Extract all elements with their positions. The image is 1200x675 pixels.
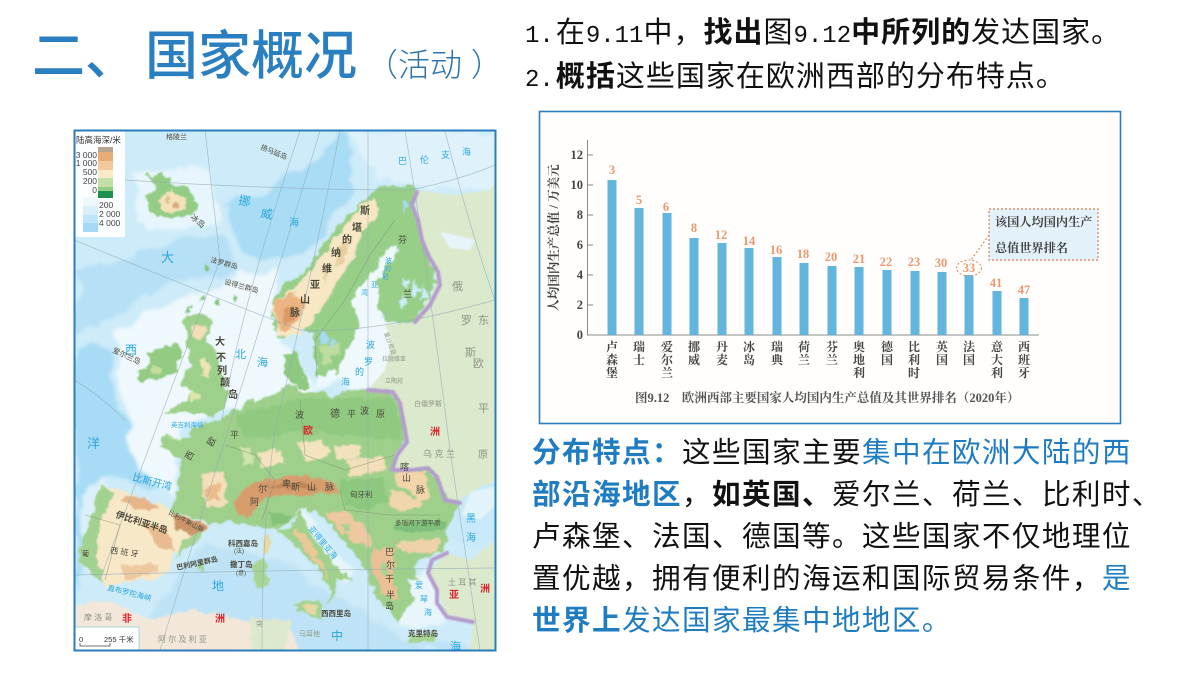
map labels: 阿 尔 及 利 亚 [158, 634, 207, 644]
map labels: 尼 [382, 273, 389, 281]
rank labels: 21 [853, 252, 865, 266]
map labels: 设得兰群岛 [223, 277, 260, 295]
map labels: 山 [300, 293, 310, 306]
country labels: 岛 [743, 352, 755, 367]
country labels: 爱 [660, 339, 673, 354]
map labels: 阿 [250, 497, 259, 507]
y axis ticks: 12 [570, 148, 583, 162]
chart frame [540, 112, 1120, 424]
map labels: 土 耳 其 [448, 577, 476, 587]
map labels: 挪 [237, 193, 252, 209]
map labels: 波 [295, 409, 304, 420]
map labels: 的 [342, 233, 352, 246]
map labels: 西 班 牙 [110, 545, 139, 559]
rank labels: 47 [1018, 283, 1030, 297]
line 2: 部沿海地区，如英国、爱尔兰、荷兰、比利时、 [532, 479, 1162, 511]
map labels: 罗 [364, 357, 373, 367]
rank labels: 23 [908, 255, 920, 269]
rank labels: 8 [691, 221, 697, 235]
map labels: 喀 [400, 461, 409, 472]
map labels: 俄 [452, 280, 463, 293]
map labels: 爱 [415, 581, 423, 590]
y axis ticks: 6 [577, 238, 583, 252]
map labels: 脉 [416, 484, 425, 495]
map labels: 比斯开湾 [131, 470, 173, 493]
map labels: 格陵兰 [166, 132, 187, 141]
mainland Europe [162, 385, 460, 625]
map labels: 山 [307, 482, 316, 492]
map legend: 500 [83, 167, 97, 177]
map legend: 200 [83, 176, 97, 186]
map labels: 大 [161, 250, 174, 265]
map labels: (法) [234, 547, 244, 555]
map labels: 比利牛斯山脉 [167, 508, 206, 534]
map labels: 原 [376, 409, 385, 419]
rank labels: 18 [797, 247, 809, 261]
rank labels: 3 [609, 163, 615, 177]
country labels: 时 [908, 365, 920, 380]
map labels: 巴利阿里群岛 [176, 554, 218, 572]
instruction 2: 2.概括这些国家在欧洲西部的分布特点。 [525, 61, 1066, 94]
map labels: 突 [256, 619, 263, 628]
country labels: 卢 [606, 339, 618, 354]
map legend: 陆高海深/米 [76, 135, 121, 145]
country labels: 堡 [606, 365, 618, 380]
country labels: 芬 [826, 339, 838, 354]
map labels: 西西里岛 [321, 608, 351, 618]
map labels: 扬马延岛 [259, 143, 289, 161]
borders [85, 220, 440, 580]
map labels: 大 [215, 335, 225, 348]
map labels: 地 [212, 579, 224, 593]
y axis ticks: 10 [570, 178, 583, 192]
country labels: 牙 [1018, 365, 1030, 380]
map labels: 东 [478, 314, 489, 327]
country labels: 丹 [716, 340, 728, 354]
map labels: 洲 [430, 426, 440, 438]
country labels: 德 [881, 339, 894, 354]
map labels: 法罗群岛 [209, 255, 239, 271]
map labels: 科西嘉岛 [228, 538, 258, 548]
North Africa [76, 600, 298, 650]
map labels: 亚 [371, 281, 378, 289]
country labels: 尔 [661, 352, 674, 367]
map labels: 干 [385, 574, 394, 584]
map labels: 爱尔兰岛 [111, 345, 143, 366]
map labels: 罗 [461, 314, 472, 327]
map labels: 海 [289, 216, 299, 229]
map labels: 波 [366, 339, 375, 350]
map labels: 颠 [220, 376, 230, 389]
map labels: 洲 [215, 613, 225, 625]
map labels: 岛 [385, 600, 394, 611]
map labels: 平 [478, 403, 489, 415]
sea background [74, 130, 496, 652]
country labels: 麦 [716, 352, 728, 367]
map labels: 伦 [420, 154, 429, 165]
map labels: 冰岛 [189, 212, 207, 230]
chart caption: 图9.12 欧洲西部主要国家人均国内生产总值及其世界排名（2020年） [635, 390, 1019, 405]
map labels: 西 [183, 449, 196, 462]
map labels: 伊比利亚半岛 [114, 508, 169, 536]
title [32, 27, 503, 86]
map labels: 斯 [291, 481, 300, 492]
country labels: 西 [1018, 339, 1030, 354]
map labels: 威 [259, 206, 274, 222]
country labels: 瑞 [633, 339, 645, 354]
rank labels [609, 163, 1030, 297]
map labels: 乌 克 兰 [423, 448, 455, 459]
callout: 该国人均国内生产 [995, 214, 1092, 229]
country labels: 国 [881, 352, 893, 367]
rank labels: 14 [743, 234, 756, 248]
map labels: 半 [386, 589, 395, 600]
map labels: 兰 [403, 288, 412, 299]
map legend: 0 [92, 185, 97, 195]
map labels: 山 [402, 473, 411, 483]
map labels: 列 [217, 364, 227, 377]
map legend: 200 [99, 200, 113, 210]
Scandinavia [272, 185, 437, 390]
bars [608, 180, 1028, 335]
map labels: 海 [257, 355, 268, 369]
map labels: 的 [355, 366, 364, 377]
map labels: 海 [341, 376, 350, 387]
map labels: 维 [322, 262, 332, 275]
country labels: 典 [771, 352, 785, 367]
map labels: 非 [122, 612, 132, 625]
map legend: 1 000 [76, 158, 97, 168]
map labels: 葡 [82, 549, 89, 558]
map labels: 亚得里亚海 [306, 524, 340, 561]
map labels: 尔 [258, 483, 267, 494]
map legend [75, 131, 125, 237]
Russia and eastern pale land [368, 180, 496, 652]
line 5: 世界上发达国家最集中地地区。 [532, 605, 952, 637]
line 4: 置优越，拥有便利的海运和国际贸易条件，是 [532, 563, 1132, 595]
country labels: 国 [936, 352, 948, 367]
rank labels: 20 [825, 250, 837, 264]
country labels: 兰 [798, 352, 810, 367]
map labels: 亚 [449, 589, 459, 601]
country labels: 威 [688, 352, 700, 367]
map labels: 欧 [303, 424, 313, 437]
map labels [82, 132, 490, 653]
graticule [74, 130, 495, 652]
country labels: 国 [963, 352, 975, 367]
map frame [74, 130, 496, 650]
country labels: 冰 [743, 340, 755, 354]
map labels: 黑 [466, 513, 476, 525]
rank labels: 16 [770, 243, 782, 257]
map labels: 摩 洛 哥 [84, 612, 112, 622]
Italy and islands [195, 510, 435, 643]
callout [956, 209, 1098, 276]
country labels: 意 [991, 339, 1004, 354]
country labels: 挪 [688, 339, 700, 354]
country labels: 兰 [661, 365, 673, 380]
rank labels: 12 [715, 228, 727, 242]
map labels: 支 [441, 149, 450, 160]
White Sea [440, 232, 475, 250]
map labels: 尔 [386, 559, 395, 570]
Russia border band [368, 192, 473, 622]
text block: distribution characteristics [532, 437, 1162, 637]
map labels: 马耳他 [299, 629, 320, 638]
y axis ticks: 4 [577, 268, 584, 282]
map labels: 琴 [420, 595, 428, 604]
country labels: 班 [1018, 352, 1030, 367]
map labels: 多瑙河下游平原 [395, 518, 441, 527]
map labels: 爱沙尼亚 [382, 331, 398, 356]
country labels: 法 [963, 339, 976, 354]
map labels: 斯 [360, 204, 370, 217]
country labels: 利 [853, 365, 865, 380]
map labels: 西 [125, 343, 137, 357]
map labels: 波 [385, 256, 392, 265]
map labels: 平 [347, 409, 356, 419]
map labels: 波 [360, 405, 369, 416]
map labels: 德 [330, 407, 340, 420]
map legend: 3 000 [76, 150, 97, 160]
map legend: 2 000 [99, 209, 121, 219]
map labels: 海 [462, 146, 471, 157]
rank labels: 6 [663, 200, 669, 214]
axes [587, 140, 1039, 335]
country labels: 荷 [798, 339, 810, 354]
map labels: 岛 [228, 388, 238, 401]
map labels: 欧 [473, 357, 484, 370]
map labels: 立陶宛 [385, 377, 403, 385]
map labels: 纳 [331, 246, 341, 259]
map labels: 中 [331, 628, 343, 643]
rank labels: 33 [963, 261, 975, 275]
map labels: 洲 [480, 583, 490, 595]
country labels: 大 [991, 352, 1003, 367]
map labels: 海 [424, 607, 432, 617]
y axis label: 人均国内生产总值 / 万美元 [546, 164, 561, 312]
country labels: 兰 [826, 352, 838, 367]
rank labels: 41 [990, 276, 1002, 290]
country labels [606, 339, 1030, 380]
Black Sea [460, 484, 488, 500]
activity tag: （活动 ） [366, 47, 503, 83]
line 1: 分布特点：这些国家主要集中在欧洲大陆的西 [532, 437, 1132, 469]
map labels: 脉 [290, 306, 300, 319]
map labels: 北 [235, 348, 246, 361]
map scale bar: 255 千米 [104, 634, 134, 644]
map scale bar: 0 [79, 635, 83, 644]
map labels: 脉 [325, 481, 334, 492]
y axis ticks: 2 [577, 298, 583, 312]
map labels: 巴 [398, 156, 407, 166]
map labels: 不 [216, 352, 226, 364]
map labels: 湾 [361, 288, 368, 297]
map labels: (意) [236, 569, 246, 577]
callout: 总值世界排名 [995, 240, 1068, 255]
y axis ticks: 0 [577, 328, 583, 342]
map scale bar [75, 627, 139, 650]
country labels: 瑞 [771, 339, 783, 354]
instruction list [525, 17, 1121, 94]
map labels: 匈牙利 [350, 489, 372, 499]
map labels: 撒丁岛 [230, 559, 253, 569]
rank labels: 30 [935, 256, 947, 270]
map labels: 欧 [204, 435, 218, 448]
country labels: 英 [936, 339, 948, 354]
map labels: 直布罗陀海峡 [107, 582, 153, 603]
map labels: 克里特岛 [408, 628, 438, 638]
map labels: 堪 [352, 221, 362, 234]
y axis ticks: 8 [577, 208, 583, 222]
line 3: 卢森堡、法国、德国等。这些国家不仅地理位 [532, 521, 1132, 553]
map labels: 斯 [465, 346, 476, 359]
map labels: 拉脱维亚 [382, 355, 406, 363]
map legend: 4 000 [99, 218, 121, 228]
rank labels: 22 [880, 255, 892, 269]
country labels: 士 [633, 353, 645, 367]
map labels: 洋 [87, 436, 100, 451]
country labels: 奥 [853, 339, 865, 354]
map labels: 亚 [310, 279, 320, 291]
map labels: 英吉利海峡 [171, 420, 204, 429]
country labels: 利 [991, 365, 1003, 380]
Iberian Peninsula [77, 487, 210, 587]
map labels: 原 [478, 449, 488, 461]
panel: physical map of Europe [74, 130, 496, 652]
icon: Iceland [146, 172, 197, 219]
country labels: 利 [908, 352, 920, 367]
main heading: 二、国家概况 [32, 27, 357, 86]
country labels: 森 [606, 352, 618, 367]
map labels: 卑 [282, 478, 291, 489]
map labels: 白俄罗斯 [414, 399, 442, 408]
rank labels: 5 [636, 193, 642, 207]
map labels: 芬 [398, 235, 407, 245]
instruction 1: 1.在9.11中，找出图9.12中所列的发达国家。 [525, 17, 1121, 50]
map labels: 巴 [385, 547, 394, 557]
map labels: 平 [230, 430, 239, 440]
country labels: 比 [908, 339, 920, 354]
map labels: 的 [384, 264, 391, 273]
Britain and Ireland [137, 262, 238, 417]
map labels: 海 [450, 639, 461, 653]
country labels: 地 [853, 352, 865, 367]
map labels: 海 [466, 531, 476, 544]
y axis ticks [570, 148, 584, 342]
